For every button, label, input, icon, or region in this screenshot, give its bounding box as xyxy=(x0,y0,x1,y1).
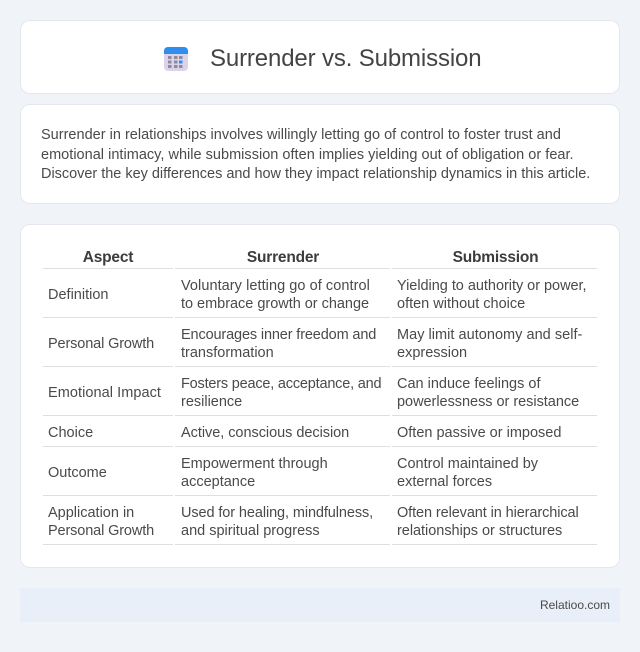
row: Emotional Impact: Can induce feelings of xyxy=(397,376,540,392)
table header: Surrender xyxy=(247,249,319,266)
row: Emotional Impact: resilience xyxy=(181,394,242,410)
intro text: Surrender in relationships involves willingly letting go of control to foster trust and xyxy=(41,127,561,143)
row: Definition: Yielding to authority or power, xyxy=(397,278,587,294)
row: Application in Personal Growth: Personal Growth xyxy=(48,523,154,539)
row: Outcome: Outcome xyxy=(48,465,107,481)
icon: calendar xyxy=(164,47,188,71)
row: Outcome: Empowerment through xyxy=(181,456,328,472)
table header xyxy=(83,249,538,266)
row: Personal Growth xyxy=(48,327,582,361)
row: Definition: often without choice xyxy=(397,296,525,312)
row: Personal Growth: Personal Growth xyxy=(48,336,154,352)
row: Personal Growth: transformation xyxy=(181,345,274,361)
row: Application in Personal Growth: Application in xyxy=(48,505,134,521)
row: Choice: Often passive or imposed xyxy=(397,425,561,441)
intro text xyxy=(41,127,590,182)
row: Definition: Definition xyxy=(48,287,108,303)
row: Choice: Choice xyxy=(48,425,93,441)
row: Choice: Active, conscious decision xyxy=(181,425,349,441)
row: Personal Growth: May limit autonomy and self- xyxy=(397,327,582,343)
panel: title card xyxy=(20,20,620,94)
row: Personal Growth: Encourages inner freedom and xyxy=(181,327,376,343)
row: Application in Personal Growth xyxy=(48,505,579,539)
footer bar xyxy=(20,588,620,622)
row: Outcome: external forces xyxy=(397,474,492,490)
footer credit: Relatioo.com xyxy=(540,598,610,612)
row: Application in Personal Growth: Often relevant in hierarchical xyxy=(397,505,579,521)
row: Emotional Impact: powerlessness or resistance xyxy=(397,394,579,410)
title: Surrender vs. Submission xyxy=(210,45,481,72)
row: Choice xyxy=(48,425,561,441)
row: Application in Personal Growth: relationships or structures xyxy=(397,523,562,539)
row: Emotional Impact: Emotional Impact xyxy=(48,385,161,401)
panel: introduction xyxy=(20,104,620,204)
row: Outcome: acceptance xyxy=(181,474,255,490)
row: Definition xyxy=(48,278,587,312)
row: Personal Growth: expression xyxy=(397,345,467,361)
row: Emotional Impact xyxy=(48,376,579,410)
row: Outcome xyxy=(48,456,538,490)
row: Application in Personal Growth: and spiritual progress xyxy=(181,523,320,539)
panel: comparison table xyxy=(20,224,620,568)
row dividers xyxy=(43,268,597,545)
row: Outcome: Control maintained by xyxy=(397,456,538,472)
row: Definition: Voluntary letting go of control xyxy=(181,278,370,294)
table header: Submission xyxy=(453,249,538,266)
intro text: Discover the key differences and how they impact relationship dynamics in this article. xyxy=(41,166,590,182)
row: Application in Personal Growth: Used for healing, mindfulness, xyxy=(181,505,373,521)
table header: Aspect xyxy=(83,249,133,266)
intro text: emotional intimacy, while submission often implies yielding out of obligation or fear. xyxy=(41,146,574,162)
row: Definition: to embrace growth or change xyxy=(181,296,369,312)
row: Emotional Impact: Fosters peace, acceptance, and xyxy=(181,376,381,392)
